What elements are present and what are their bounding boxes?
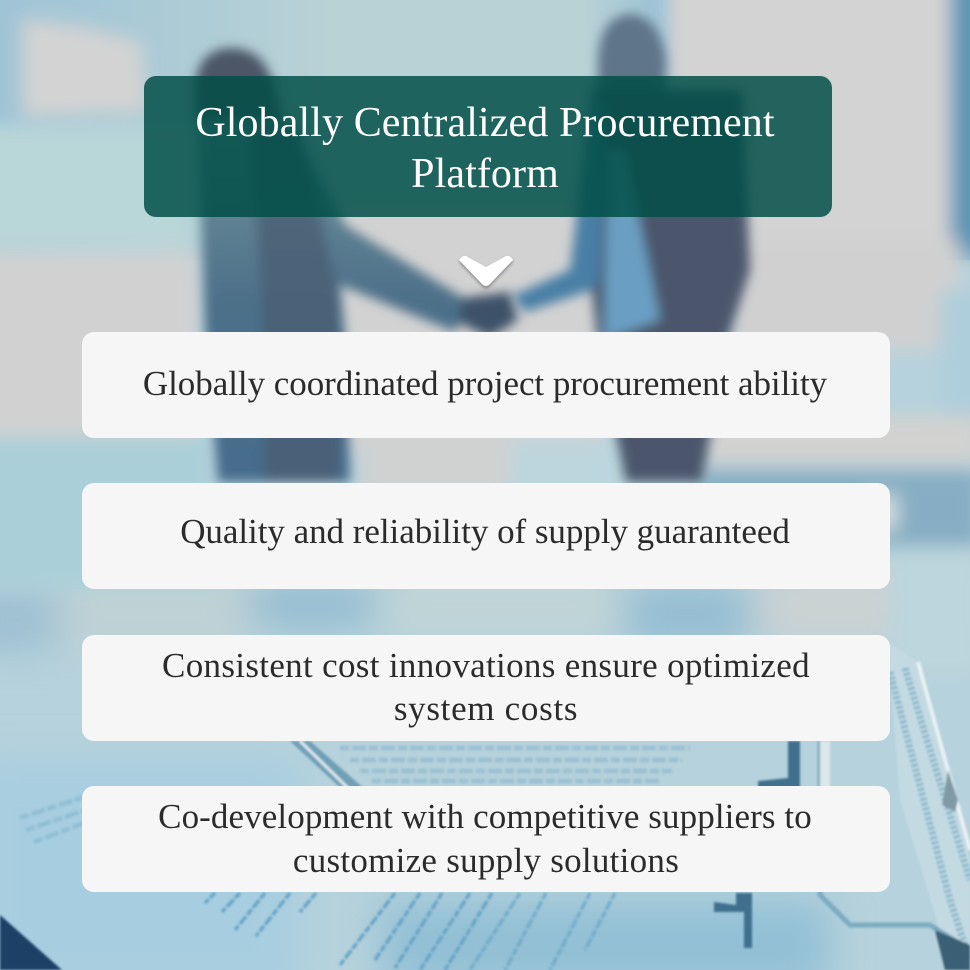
card: project procurement: Globally coordinated project procurement ability [143,364,827,403]
light window areas [0,0,970,672]
title banner: Globally Centralized Procurement [195,100,775,146]
card: co-development [82,786,890,892]
icon: downward chevron [458,256,514,290]
title banner [144,76,832,217]
card: cost innovations: Consistent cost innovations ensure optimized [162,646,810,685]
card: cost innovations: system costs [394,689,578,728]
lower table tones [0,570,970,970]
right person silhouette [512,14,750,482]
card: quality and reliability [82,483,890,589]
title banner: Platform [411,151,559,197]
card: co-development: customize supply solutions [293,841,679,880]
card: cost innovations [82,635,890,741]
card: project procurement [82,332,890,438]
documents, pen and clipboard [0,642,970,970]
card: co-development: Co-development with competitive suppliers to [158,797,812,836]
card: quality and reliability: Quality and reliability of supply guaranteed [180,512,790,551]
left person silhouette [196,48,518,482]
